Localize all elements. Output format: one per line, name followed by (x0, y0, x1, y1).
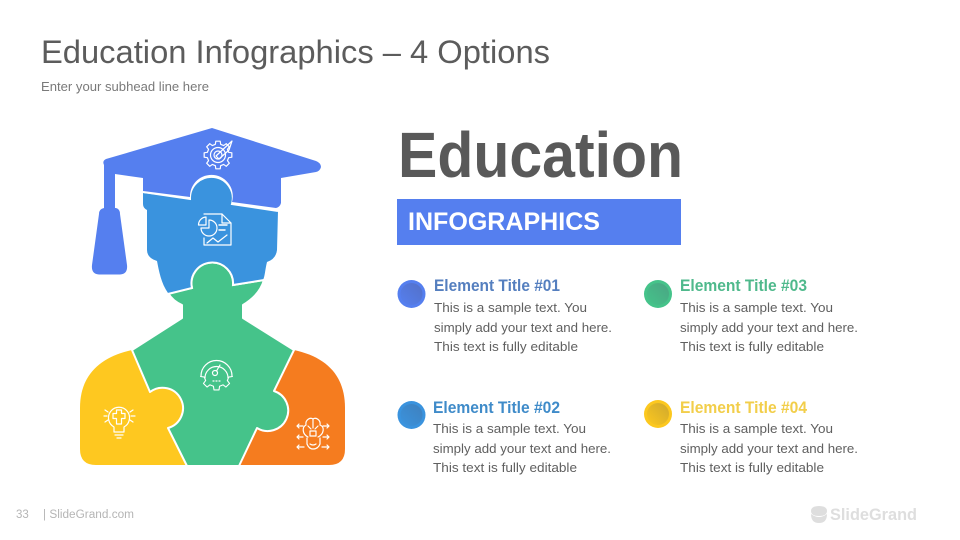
list item 03 (644, 277, 858, 354)
marker dot 04 (644, 400, 672, 428)
puzzle figure: graduate (80, 128, 345, 466)
element title 04: Element Title #04 (680, 399, 808, 417)
element title 03: Element Title #03 (680, 277, 807, 295)
icon: gear and pencil (204, 141, 232, 169)
body text 04 (680, 422, 858, 475)
logo: SlideGrand: SlideGrand (830, 505, 917, 524)
body text 03 (680, 301, 858, 354)
list item 04 (644, 399, 858, 475)
heading: Education: Education (398, 119, 683, 191)
body text 04: simply add your text and here. (680, 442, 858, 456)
marker dot 03 (644, 280, 672, 308)
body text 03: This text is fully editable (680, 340, 824, 354)
puzzle piece: blue head (143, 177, 278, 293)
marker dot 02 (398, 401, 426, 429)
body text 03: simply add your text and here. (680, 321, 858, 335)
icon: speedometer gear (201, 360, 232, 390)
footer: page number and site: 33 (16, 509, 29, 521)
body text 02: This text is fully editable (433, 461, 577, 475)
footer: page number and site: | SlideGrand.com (43, 509, 134, 521)
title: Education Infographics – 4 Options (41, 34, 550, 70)
body text 04: This text is fully editable (680, 461, 824, 475)
puzzle piece: green torso (132, 263, 294, 466)
body text 03: This is a sample text. You (680, 301, 833, 315)
body text 02 (433, 422, 611, 475)
icon: brain and head (297, 418, 329, 449)
puzzle piece: graduation cap (92, 128, 321, 274)
body text 01: This is a sample text. You (434, 301, 587, 315)
body text 01: simply add your text and here. (434, 321, 612, 335)
banner: INFOGRAPHICS: INFOGRAPHICS (408, 208, 600, 236)
white seam between head and torso (168, 263, 264, 294)
body text 02: simply add your text and here. (433, 442, 611, 456)
icon: report with charts (198, 214, 231, 245)
body text 01: This text is fully editable (434, 340, 578, 354)
white seam between cap and head (143, 177, 278, 211)
subhead: Enter your subhead line here (41, 80, 209, 94)
puzzle piece: orange shoulder (236, 350, 345, 465)
body text 02: This is a sample text. You (433, 422, 586, 436)
body text 04: This is a sample text. You (680, 422, 833, 436)
marker dot 01 (398, 280, 426, 308)
list item 02 (398, 399, 611, 475)
banner: INFOGRAPHICS (397, 199, 681, 245)
icon: light bulb with puzzle piece (104, 407, 135, 438)
list item 01 (398, 277, 612, 354)
puzzle piece: yellow shoulder (80, 350, 190, 465)
body text 01 (434, 301, 612, 354)
element title 01: Element Title #01 (434, 277, 560, 295)
element title 02: Element Title #02 (433, 399, 560, 417)
